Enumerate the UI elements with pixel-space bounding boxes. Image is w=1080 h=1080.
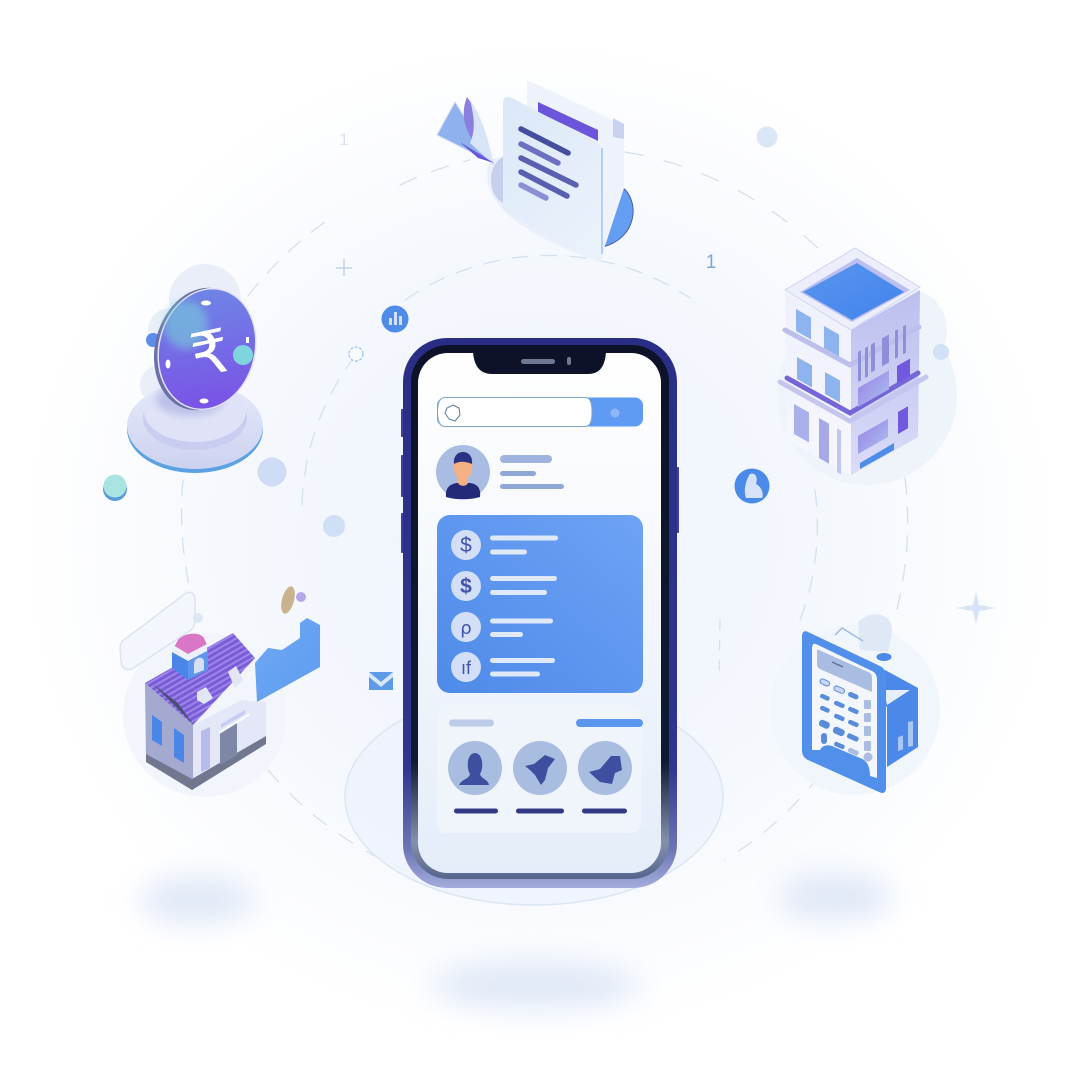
roof vents [197, 666, 243, 704]
coin symbols: $ [460, 534, 472, 557]
windows and door [152, 710, 250, 772]
phone side buttons [401, 409, 679, 553]
icon: teal token [103, 474, 127, 501]
paper plane [437, 97, 494, 165]
coin [141, 277, 268, 421]
contact glyphs [459, 753, 622, 785]
back page [527, 80, 624, 252]
contact avatars [448, 741, 632, 795]
calculator display [817, 650, 872, 692]
coin symbols: ıf [461, 658, 472, 678]
icon: small plus [336, 259, 352, 276]
coin symbols: $ [460, 575, 472, 598]
house backdrop [123, 633, 287, 797]
floating digit one: 1 [706, 252, 716, 273]
contact name bars [454, 808, 627, 814]
phone inner bezel [411, 345, 669, 879]
faint digit one: 1 [339, 130, 349, 149]
phone body [403, 338, 677, 888]
calculator body [802, 631, 886, 793]
coin symbols: ρ [460, 618, 472, 639]
icon: chart badge [382, 306, 408, 332]
house walls [145, 683, 193, 790]
blue half disc [603, 187, 633, 247]
calculator keys [818, 678, 872, 762]
front page [503, 97, 602, 260]
roof [785, 248, 920, 330]
paint blob and dot [279, 585, 306, 615]
coin rows [451, 530, 481, 682]
document text lines [521, 129, 576, 198]
roof [145, 633, 255, 725]
user profile [436, 445, 564, 499]
floor shadows [139, 873, 893, 1009]
calculator face [812, 644, 877, 778]
floating decorative circles [258, 126, 778, 537]
document backdrop [487, 130, 620, 262]
foundation [146, 736, 266, 790]
floor ledges [780, 327, 926, 421]
icon: mail [369, 672, 393, 690]
chimney [172, 634, 208, 680]
building backdrop [777, 288, 957, 485]
transaction lines [490, 536, 558, 676]
icon: house with bar chart [120, 585, 320, 797]
phone screen [418, 353, 661, 873]
icon: calculator with folder [770, 614, 940, 795]
wallet folder [880, 670, 918, 767]
coin glow blob [140, 264, 241, 405]
contacts card [437, 705, 643, 833]
speech bubble [120, 592, 195, 670]
calculator backdrop [770, 625, 940, 795]
right wall [851, 290, 920, 475]
panel: smartphone [401, 338, 679, 888]
blue bar chart [255, 618, 320, 702]
icon: small ring [349, 347, 363, 361]
icon: sparkle plus [956, 592, 996, 624]
rupee symbol: ₹ [184, 316, 236, 392]
coin symbols [460, 534, 472, 678]
purple header bar [538, 102, 598, 141]
avatar [436, 445, 490, 499]
icon: rupee coin on pedestal [127, 264, 268, 473]
right windows [858, 325, 910, 469]
profile text lines [500, 455, 552, 463]
phone notch [473, 352, 606, 374]
blue transactions panel [437, 515, 643, 693]
icon: office building [777, 248, 957, 485]
pedestal [127, 380, 263, 473]
left wall [785, 292, 851, 475]
search bar [437, 398, 643, 426]
phone base disc [345, 689, 723, 905]
icon: document folder [437, 80, 633, 262]
dashed orbit rings [182, 152, 908, 870]
icon: user badge [734, 468, 770, 504]
left windows [794, 309, 841, 475]
